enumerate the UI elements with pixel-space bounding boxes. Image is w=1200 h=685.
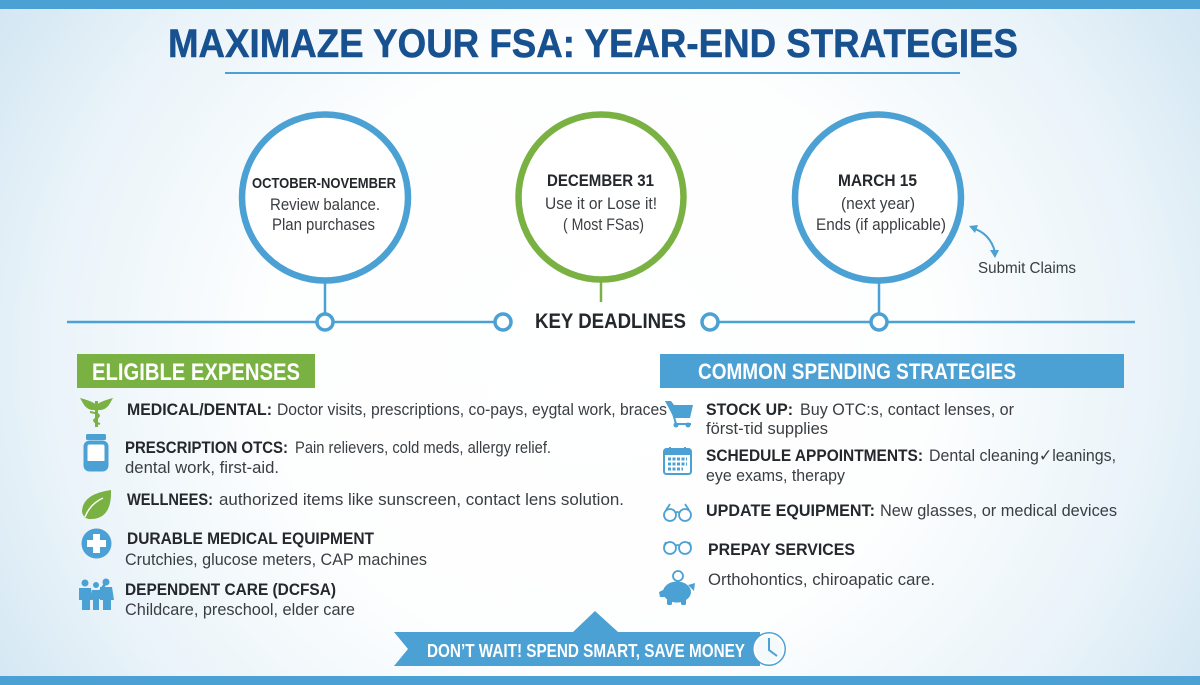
item: update equipment bbox=[706, 501, 1117, 520]
callout banner bbox=[394, 611, 786, 666]
item: durable medical equipment bbox=[125, 529, 427, 569]
icon: calendar bbox=[664, 447, 691, 474]
deadline circle: December 31: DECEMBER 31 bbox=[547, 171, 654, 190]
text: submit claims: Submit Claims bbox=[978, 260, 1076, 277]
icon: piggy bank bbox=[659, 571, 695, 605]
icon: family bbox=[79, 578, 114, 610]
item: prepay services: PREPAY SERVICES bbox=[708, 540, 855, 559]
panel: common spending strategies bbox=[659, 354, 1124, 605]
deadline circle: March 15 bbox=[795, 114, 961, 280]
item: schedule appointments: SCHEDULE APPOINTMENTS: bbox=[706, 446, 923, 465]
title: MAXIMAZE YOUR FSA: YEAR-END STRATEGIES bbox=[168, 22, 1018, 66]
item: stock up bbox=[706, 400, 1014, 438]
icon: medical plus bbox=[82, 528, 112, 558]
deadline circle: December 31 bbox=[518, 114, 684, 280]
item: prescription otcs: PRESCRIPTION OTCS: bbox=[125, 438, 288, 457]
icon: glasses bbox=[664, 542, 691, 554]
item: medical/dental: MEDICAL/DENTAL: bbox=[127, 400, 272, 419]
deadline circle: March 15: MARCH 15 bbox=[838, 171, 917, 190]
heading: eligible expenses: ELIGIBLE EXPENSES bbox=[92, 359, 300, 386]
item: wellnees: WELLNEES: bbox=[127, 490, 213, 509]
item: dependent care: DEPENDENT CARE (DCFSA) bbox=[125, 580, 336, 599]
item: medical/dental: Doctor visits, prescriptions, co-pays, eygtal work, braces bbox=[277, 400, 667, 419]
icon: shopping cart bbox=[665, 401, 693, 428]
item: schedule appointments bbox=[706, 446, 1116, 485]
item: orthodontics: Orthohontics, chiroapatic care. bbox=[708, 570, 935, 589]
item: stock up: STOCK UP: bbox=[706, 400, 793, 419]
deadline circle: March 15: (next year) bbox=[841, 194, 915, 213]
item: schedule appointments: Dental cleaning✓leanings, bbox=[929, 446, 1116, 465]
heading: eligible expenses bbox=[77, 354, 315, 388]
item: durable medical equipment: Crutchies, glucose meters, CAP machines bbox=[125, 550, 427, 569]
icon: caduceus bbox=[80, 398, 113, 427]
item: durable medical equipment: DURABLE MEDICAL EQUIPMENT bbox=[127, 529, 375, 548]
deadline circle: October-November: Plan purchases bbox=[272, 215, 375, 234]
heading: key deadlines: KEY DEADLINES bbox=[535, 310, 686, 333]
item: wellnees: authorized items like sunscreen, contact lens solution. bbox=[219, 490, 624, 509]
heading: common spending strategies: COMMON SPENDING STRATEGIES bbox=[698, 359, 1016, 384]
deadline circle: October-November: Review balance. bbox=[270, 195, 380, 214]
icon: leaf bbox=[82, 490, 111, 519]
icon: medicine bottle bbox=[86, 434, 106, 470]
item: medical/dental bbox=[127, 400, 667, 419]
deadline circle: October-November: OCTOBER-NOVEMBER bbox=[252, 175, 396, 192]
item: update equipment: New glasses, or medical devices bbox=[880, 501, 1117, 520]
item: stock up: först-τid supplies bbox=[706, 419, 828, 438]
item: update equipment: UPDATE EQUIPMENT: bbox=[706, 501, 875, 520]
icon: clock bbox=[752, 632, 786, 666]
deadline circle: March 15: Ends (if applicable) bbox=[816, 215, 946, 234]
callout banner: DON’T WAIT! SPEND SMART, SAVE MONEY bbox=[427, 641, 745, 661]
panel: eligible expenses bbox=[77, 354, 667, 619]
item: dependent care: Childcare, preschool, elder care bbox=[125, 600, 355, 619]
timeline: key deadlines bbox=[67, 282, 1135, 330]
deadline circle: December 31: Use it or Lose it! bbox=[545, 194, 657, 213]
item: prescription otcs: dental work, first-aid. bbox=[125, 458, 279, 477]
item: prescription otcs: Pain relievers, cold meds, allergy relief. bbox=[295, 438, 551, 457]
item: schedule appointments: eye exams, therapy bbox=[706, 466, 845, 485]
item: prescription otcs bbox=[125, 438, 551, 477]
arrow: submit claims bbox=[969, 225, 999, 258]
item: dependent care bbox=[125, 580, 355, 619]
icon: glasses bbox=[664, 504, 691, 521]
item: stock up: Buy OTC:s, contact lenses, or bbox=[800, 400, 1014, 419]
deadline circle: October-November bbox=[242, 114, 408, 280]
heading: common spending strategies bbox=[660, 354, 1124, 388]
deadline circle: December 31: ( Most FSas) bbox=[563, 215, 644, 234]
